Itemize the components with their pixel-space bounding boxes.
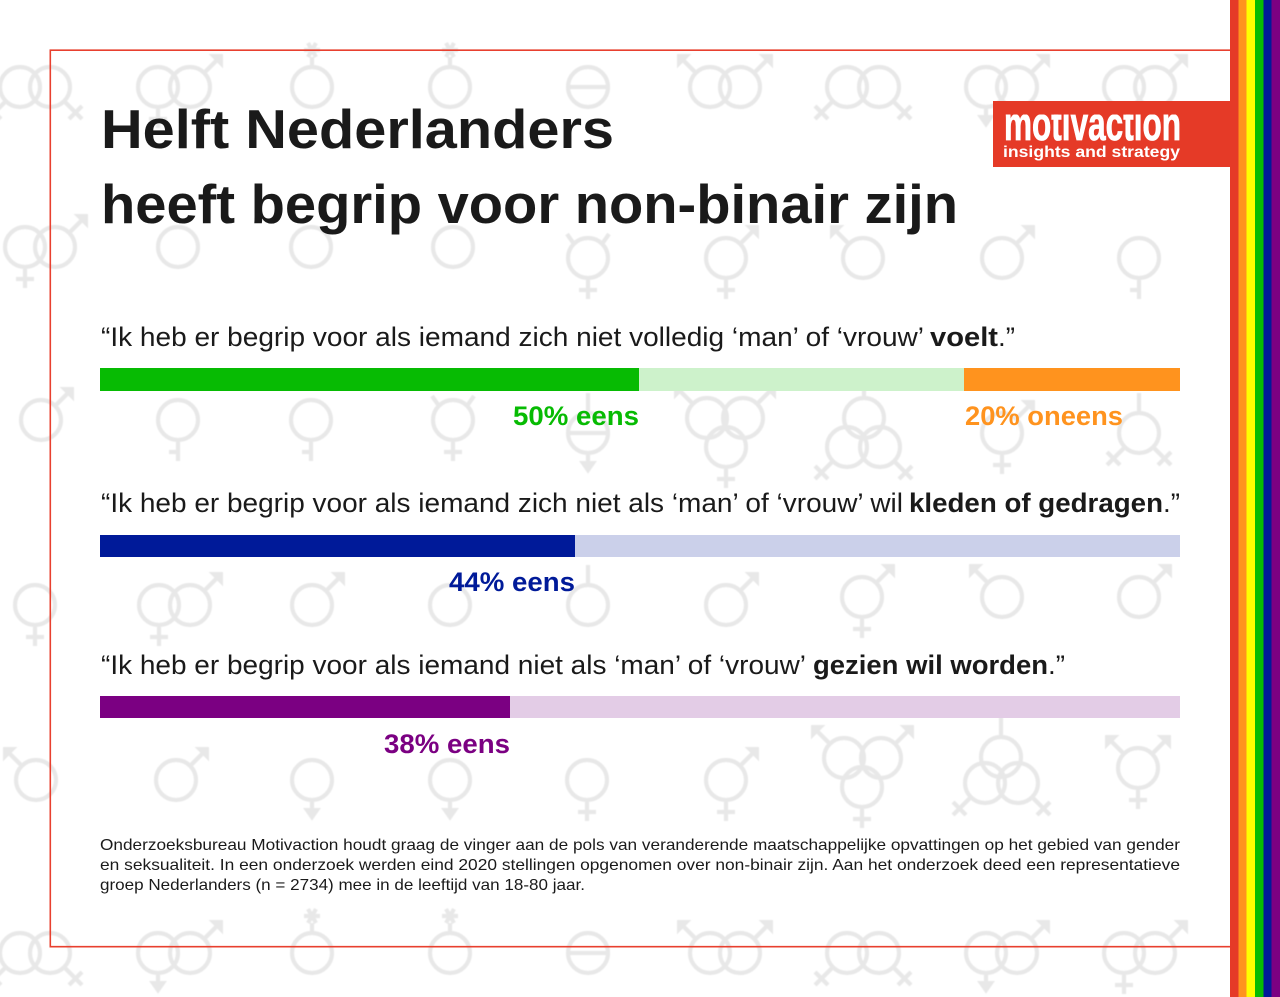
statement 1: “Ik heb er begrip voor als iemand zich niet volledig ‘man’ of ‘vrouw’ (101, 322, 924, 352)
statement 3: “Ik heb er begrip voor als iemand niet als ‘man’ of ‘vrouw’ (101, 650, 806, 680)
title (101, 98, 958, 235)
label: 44% eens: 44% eens (449, 567, 575, 597)
row 1 (0, 43, 1187, 128)
bar 3 (100, 696, 1180, 718)
row 3 (21, 378, 1171, 488)
row 4 (15, 565, 1171, 646)
row 2 (5, 215, 1159, 299)
row 5 (4, 717, 1170, 828)
label: 20% oneens: 20% oneens (965, 401, 1123, 431)
footnote: groep Nederlanders (n = 2734) mee in de leeftijd van 18-80 jaar. (100, 877, 585, 894)
statement 3: gezien wil worden (813, 650, 1048, 680)
title: heeft begrip voor non-binair zijn (101, 173, 958, 235)
statement 1: voelt (930, 322, 998, 352)
label: 38% eens: 38% eens (384, 729, 510, 759)
footnote: Onderzoeksbureau Motivaction houdt graag de vinger aan de pols van veranderende maatschappelijke opvattingen op het gebied van gender (100, 837, 1181, 854)
footnote: en seksualiteit. In een onderzoek werden eind 2020 stellingen opgenomen over non-binair zijn. Aan het onderzoek deed een representatieve (100, 857, 1180, 874)
statement 2: .” (1163, 488, 1180, 518)
rainbow stripe (1230, 0, 1280, 997)
footnote (100, 837, 1181, 894)
statement 1: .” (998, 322, 1015, 352)
title: Helft Nederlanders (101, 98, 614, 160)
statement 2: “Ik heb er begrip voor als iemand zich niet als ‘man’ of ‘vrouw’ wil (101, 488, 903, 518)
statement 2: kleden of gedragen (909, 488, 1163, 518)
row 6 (0, 909, 1187, 994)
logo: motivaction: motivaction (1004, 97, 1181, 150)
logo: motivaction (993, 97, 1230, 167)
label: 50% eens: 50% eens (513, 401, 639, 431)
stacked bar 1 (100, 368, 1180, 391)
bar 2 (100, 535, 1180, 557)
statement 3: .” (1048, 650, 1065, 680)
logo: motivaction: insights and strategy (1003, 144, 1180, 161)
